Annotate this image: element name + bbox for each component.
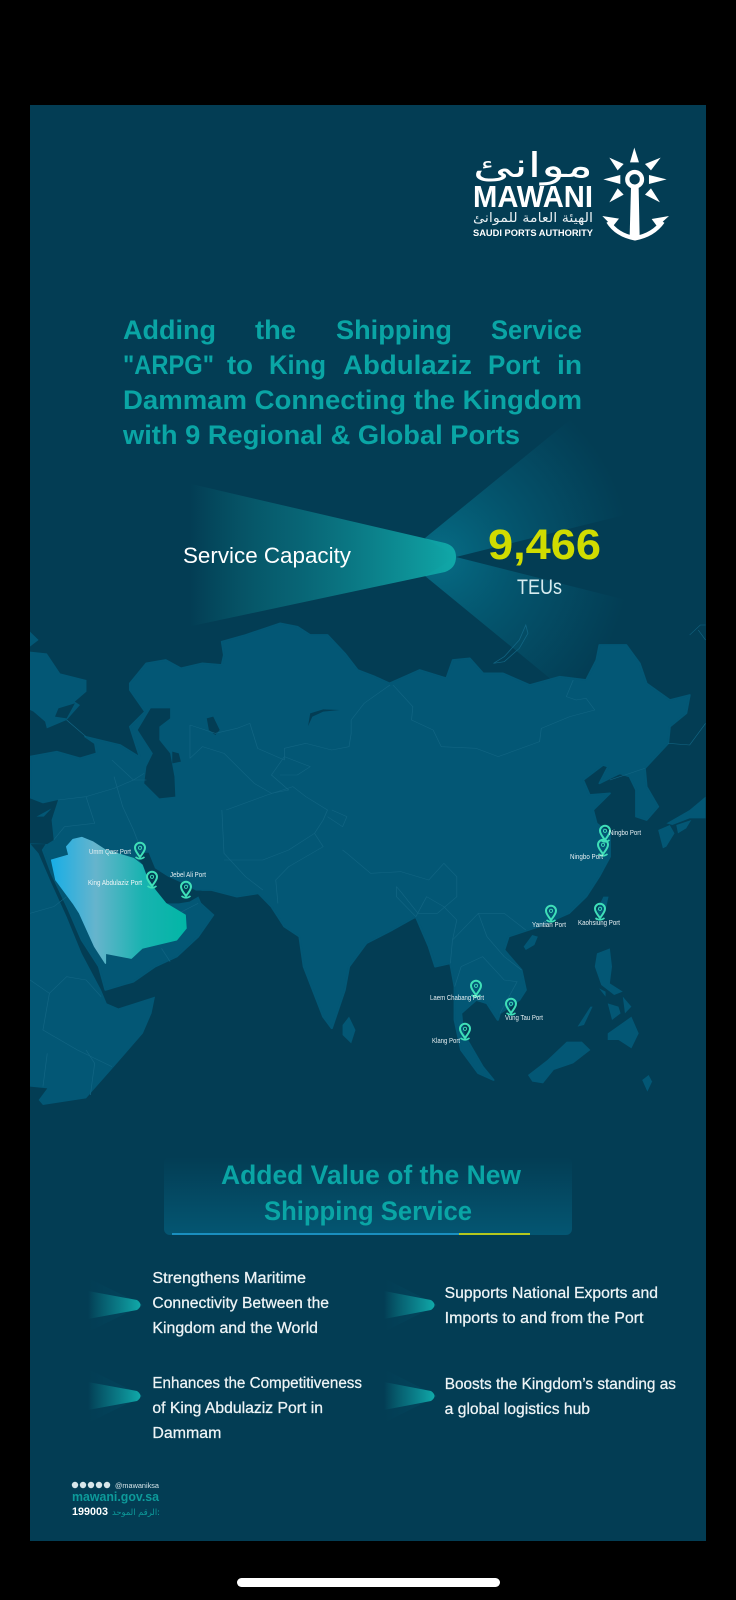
- capacity unit: TEUs: [517, 576, 562, 599]
- port: Vung Tau: [505, 999, 543, 1022]
- land: Africa: [30, 843, 155, 1105]
- icon: anchor with sun rays: [602, 148, 669, 238]
- service capacity label: Service Capacity: [183, 543, 352, 568]
- port: Klang: Klang Port: [432, 1038, 460, 1045]
- title: King: [269, 350, 326, 380]
- title: the: [255, 315, 296, 345]
- port: Vung Tau: Vung Tau Port: [505, 1015, 543, 1022]
- section heading: added value: [164, 1157, 572, 1235]
- land: Eurasia: [30, 623, 690, 1080]
- port: Umm Qasr: Umm Qasr Port: [89, 849, 131, 856]
- benefit: logistics hub: [384, 1369, 676, 1423]
- port: Jebel Ali: [170, 872, 206, 898]
- logo wordmark: MAWANI: [473, 180, 593, 214]
- Sakhalin outline: [690, 625, 706, 640]
- port: Laem Chabang: Laem Chabang Port: [430, 995, 484, 1002]
- logo: Mawani: [473, 146, 669, 239]
- arrow icon: [384, 1278, 437, 1332]
- benefit text: a global logistics hub: [445, 1401, 590, 1418]
- benefit: competitiveness: [88, 1369, 362, 1442]
- islands: [343, 797, 706, 1092]
- title: Abdulaziz: [343, 350, 472, 380]
- logo arabic name: موانئ: [473, 146, 593, 186]
- benefit text: Imports to and from the Port: [445, 1310, 644, 1327]
- title: Service: [491, 315, 582, 345]
- social icons: [72, 1482, 110, 1488]
- port markers: [88, 826, 641, 1045]
- port: Yantian: [532, 906, 566, 929]
- arrow icon: [88, 1369, 143, 1423]
- title: Shipping: [336, 315, 452, 345]
- title: in: [557, 350, 582, 380]
- benefit text: [152, 1375, 362, 1442]
- unified number: 199003: [72, 1506, 108, 1518]
- arrow icon: [384, 1369, 437, 1423]
- heading text: [221, 1160, 522, 1226]
- benefit text: Connectivity Between the: [152, 1295, 329, 1312]
- beam: lower right fan: [425, 557, 705, 740]
- port: Ningbo north: Ningbo Port: [609, 830, 641, 837]
- benefit text: Enhances the Competitiveness: [152, 1375, 362, 1392]
- footer contact: [72, 1481, 160, 1518]
- seas and lakes: [30, 703, 340, 903]
- unified number arabic label: الرقم الموحد:: [112, 1508, 160, 1518]
- map of Asia: [30, 622, 706, 1105]
- benefit text: of King Abdulaziz Port in: [152, 1400, 323, 1417]
- title: "ARPG": [123, 350, 214, 380]
- port: King Abdulaziz: King Abdulaziz Port: [88, 880, 142, 887]
- land: Eastern Europe: [30, 652, 86, 728]
- benefit text: Strengthens Maritime: [152, 1270, 306, 1287]
- Saudi Arabia highlighted: [52, 837, 186, 963]
- social handle: @mawaniksa: [115, 1481, 160, 1490]
- island: Cyprus: [36, 808, 52, 817]
- benefit: exports and imports: [384, 1278, 658, 1332]
- benefit text: Supports National Exports and: [445, 1285, 658, 1302]
- port: Klang: [432, 1024, 470, 1045]
- capacity number: 9,466: [488, 521, 601, 569]
- benefit text: Dammam: [152, 1425, 221, 1442]
- port: Kaohsiung: Kaohsiung Port: [578, 920, 620, 927]
- port: Yantian: Yantian Port: [532, 922, 566, 929]
- website: mawani.gov.sa: [72, 1489, 160, 1504]
- beams: capacity spotlight: [187, 375, 705, 740]
- benefit text: [152, 1270, 329, 1337]
- country borders: [30, 680, 706, 1095]
- title: Adding: [123, 315, 216, 345]
- beam: service capacity cone: [187, 483, 456, 627]
- heading text: Shipping Service: [264, 1196, 472, 1226]
- benefit: maritime connectivity: [88, 1270, 329, 1337]
- benefit text: Boosts the Kingdom’s standing as: [445, 1376, 676, 1393]
- benefit text: [445, 1376, 676, 1418]
- benefit text: [445, 1285, 658, 1327]
- title: with 9 Regional & Global Ports: [122, 420, 520, 450]
- title: Dammam Connecting the Kingdom: [123, 385, 582, 415]
- logo arabic subtitle: الهيئة العامة للموانئ: [473, 211, 593, 226]
- port: Laem Chabang: [430, 981, 484, 1002]
- port: Ningbo south: [570, 840, 608, 861]
- title: to: [227, 350, 253, 380]
- logo english subtitle: SAUDI PORTS AUTHORITY: [473, 228, 594, 239]
- heading backing box: [164, 1157, 572, 1235]
- arrow icon: [88, 1278, 143, 1332]
- beam: upper right fan: [425, 375, 705, 557]
- port: Ningbo north: [600, 826, 641, 842]
- title: Port: [488, 350, 540, 380]
- port: Kaohsiung: [578, 904, 620, 927]
- port: Umm Qasr: [89, 843, 145, 859]
- heading underline: [172, 1233, 530, 1235]
- benefit text: Kingdom and the World: [152, 1320, 318, 1337]
- heading text: Added Value of the New: [221, 1160, 522, 1190]
- phone home indicator: [237, 1578, 500, 1587]
- port: King Abdulaziz: [88, 872, 157, 888]
- title: [122, 315, 582, 450]
- port: Jebel Ali: Jebel Ali Port: [170, 872, 206, 879]
- port: Ningbo south: Ningbo Port: [570, 854, 603, 861]
- land: Europe corner: [30, 632, 39, 647]
- lake Baikal outline: [493, 625, 528, 663]
